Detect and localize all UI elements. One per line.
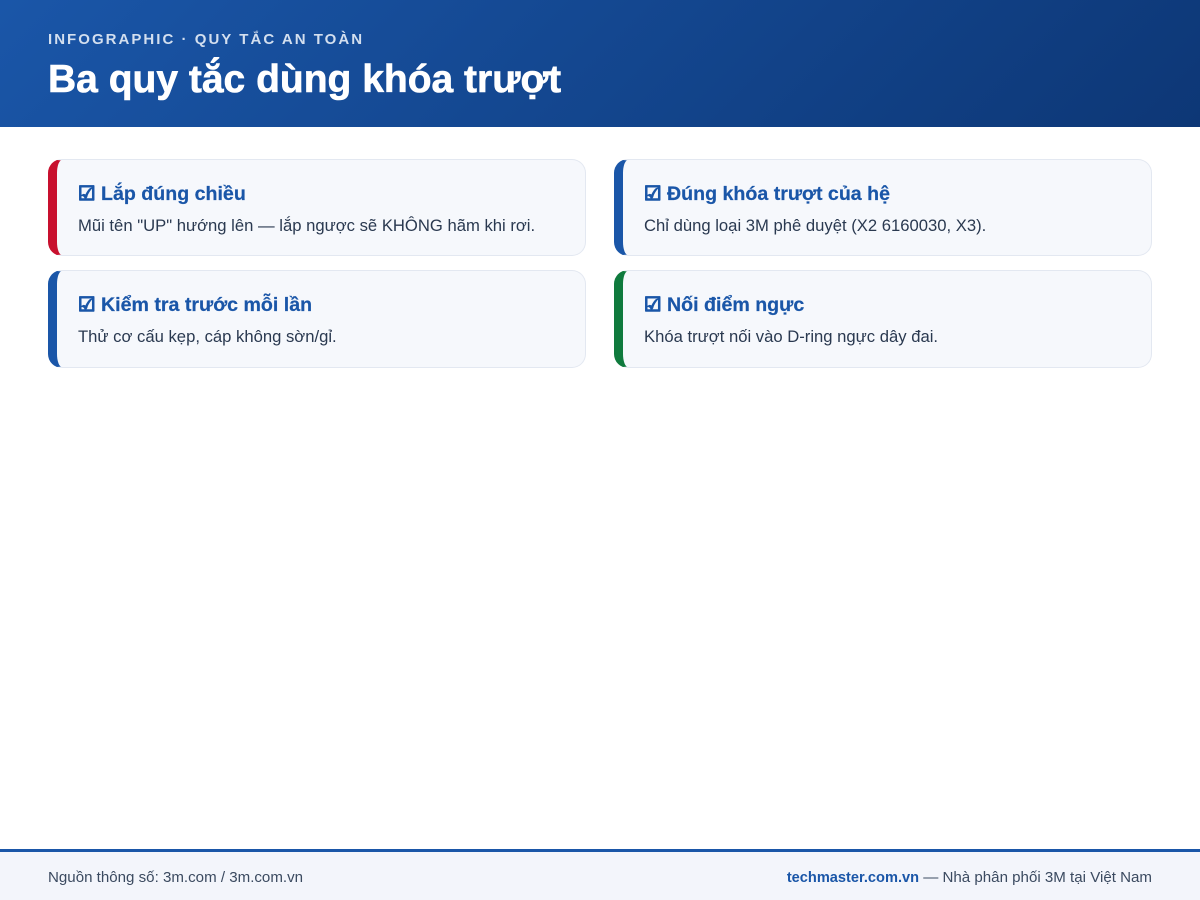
panel: chest connection xyxy=(614,270,1152,368)
title: Ba quy tắc dùng khóa trượt xyxy=(48,58,561,101)
distributor credit: techmaster.com.vn — Nhà phân phối 3M tại Việt Nam xyxy=(787,869,1152,886)
panel: inspect before use xyxy=(48,270,586,368)
source note: Nguồn thông số: 3m.com / 3m.com.vn xyxy=(48,869,303,886)
text: install direction: Mũi tên "UP" hướng lên — lắp ngược sẽ KHÔNG hãm khi rơi. xyxy=(78,216,535,235)
footer xyxy=(0,849,1200,900)
text: chest connection: Khóa trượt nối vào D-ring ngực dây đai. xyxy=(644,327,938,346)
text: correct system: Chỉ dùng loại 3M phê duyệt (X2 6160030, X3). xyxy=(644,216,986,235)
heading: chest connection: ☑ Nối điểm ngực xyxy=(644,294,804,316)
header banner xyxy=(0,0,1200,127)
panel: correct system xyxy=(614,159,1152,256)
panel: install direction xyxy=(48,159,586,256)
heading: correct system: ☑ Đúng khóa trượt của hệ xyxy=(644,183,890,205)
text: inspect before use: Thử cơ cấu kẹp, cáp không sờn/gỉ. xyxy=(78,327,337,346)
heading: inspect before use: ☑ Kiểm tra trước mỗi lần xyxy=(78,294,312,316)
heading: install direction: ☑ Lắp đúng chiều xyxy=(78,183,246,205)
eyebrow label: INFOGRAPHIC · QUY TẮC AN TOÀN xyxy=(48,31,364,48)
